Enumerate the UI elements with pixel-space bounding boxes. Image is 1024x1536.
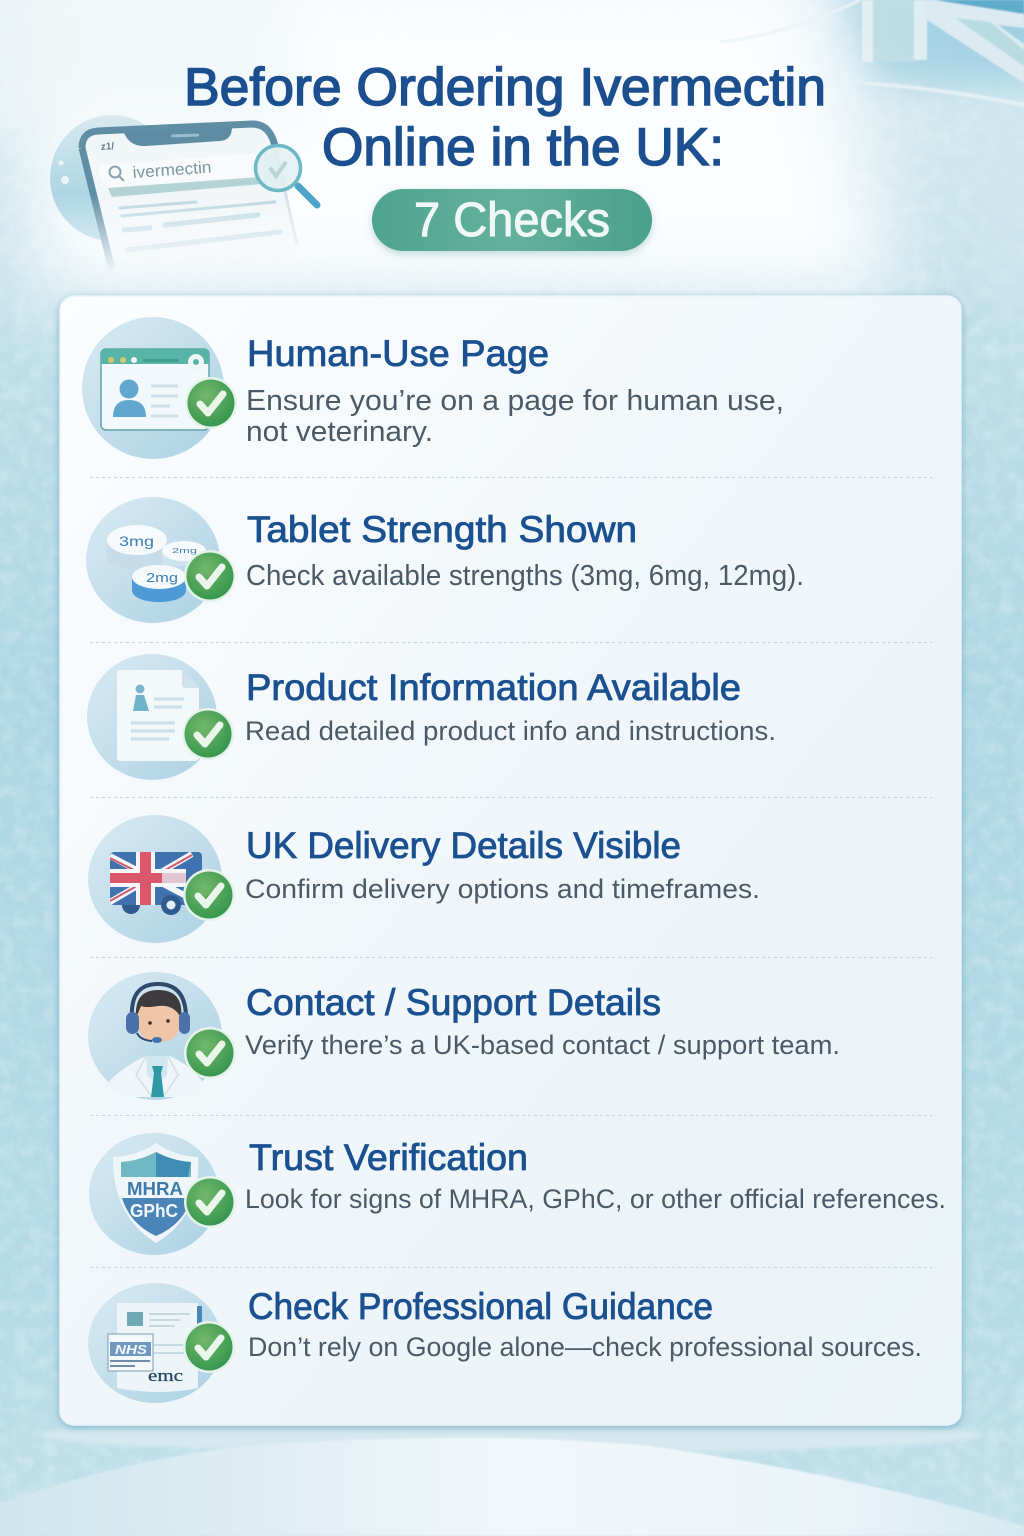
badge: 7 Checks: 7 Checks xyxy=(414,194,610,247)
description: Check available strengths (3mg, 6mg, 12mg). xyxy=(246,560,804,592)
result lines xyxy=(120,202,275,216)
check badge xyxy=(184,1176,236,1228)
title: Before Ordering Ivermectin xyxy=(184,58,826,117)
icon: tablets: 2mg xyxy=(146,570,178,585)
icon: tablets: 2mg xyxy=(172,548,197,555)
search text: ivermectin xyxy=(132,159,212,182)
heading: Check Professional Guidance xyxy=(248,1286,713,1327)
decorative UK flag in the top-right corner xyxy=(720,0,1024,105)
description: Ensure you’re on a page for human use, xyxy=(246,385,784,417)
heading: Product Information Available xyxy=(246,667,741,708)
icon: NHS and emc documents xyxy=(88,1283,222,1403)
check 1: human-use page xyxy=(82,317,784,459)
status bar text: z1/ xyxy=(100,141,115,153)
check 2: tablet strength xyxy=(86,497,804,623)
heading: Contact / Support Details xyxy=(246,982,661,1023)
check badge xyxy=(184,550,236,602)
description line 2: not veterinary. xyxy=(246,416,433,448)
phone notch xyxy=(124,127,232,146)
description: Don’t rely on Google alone—check professional sources. xyxy=(248,1332,922,1362)
check 6: trust verification xyxy=(89,1133,946,1255)
check 3: product information xyxy=(87,654,776,780)
check badge xyxy=(182,708,234,760)
description: Look for signs of MHRA, GPhC, or other official references. xyxy=(245,1184,946,1214)
icon: NHS and emc documents: emc xyxy=(148,1366,184,1385)
description: Verify there’s a UK-based contact / support team. xyxy=(245,1030,840,1060)
icon: magnifying glass xyxy=(256,146,317,205)
check badge xyxy=(184,1027,236,1079)
heading: UK Delivery Details Visible xyxy=(246,825,681,866)
icon: phone searching for ivermectin xyxy=(50,115,300,270)
check badge xyxy=(185,377,237,429)
icon: MHRA GPhC shield: MHRA xyxy=(127,1179,183,1199)
icon: tablets: 3mg xyxy=(119,533,154,549)
title xyxy=(184,58,826,177)
icon: MHRA GPhC shield: GPhC xyxy=(130,1201,178,1221)
icon: MHRA GPhC shield xyxy=(89,1133,219,1255)
search bar xyxy=(99,153,260,188)
panel: checklist xyxy=(60,296,961,1425)
badge: 7 Checks xyxy=(372,189,652,251)
icon: browser profile page xyxy=(82,317,224,459)
heading: Human-Use Page xyxy=(247,333,549,374)
icon: support agent with headset xyxy=(88,972,222,1100)
snow mound xyxy=(0,1438,1024,1536)
phone bezel xyxy=(82,124,275,270)
heading: Trust Verification xyxy=(249,1137,528,1178)
phone backdrop circle xyxy=(50,115,146,240)
title: Online in the UK: xyxy=(322,118,724,177)
check badge xyxy=(183,869,235,921)
description: Confirm delivery options and timeframes. xyxy=(245,874,760,904)
icon: NHS and emc documents: NHS xyxy=(115,1342,147,1357)
icon: document xyxy=(87,654,217,780)
check badge xyxy=(183,1321,235,1373)
icon: UK flag delivery van xyxy=(88,815,222,943)
icon: tablets xyxy=(86,497,220,623)
heading: Tablet Strength Shown xyxy=(247,509,637,550)
check 5: contact and support xyxy=(88,972,840,1100)
check 4: UK delivery xyxy=(88,815,760,943)
description: Read detailed product info and instructions. xyxy=(245,716,776,746)
phone screen xyxy=(80,133,288,241)
check 7: professional guidance xyxy=(88,1283,922,1403)
